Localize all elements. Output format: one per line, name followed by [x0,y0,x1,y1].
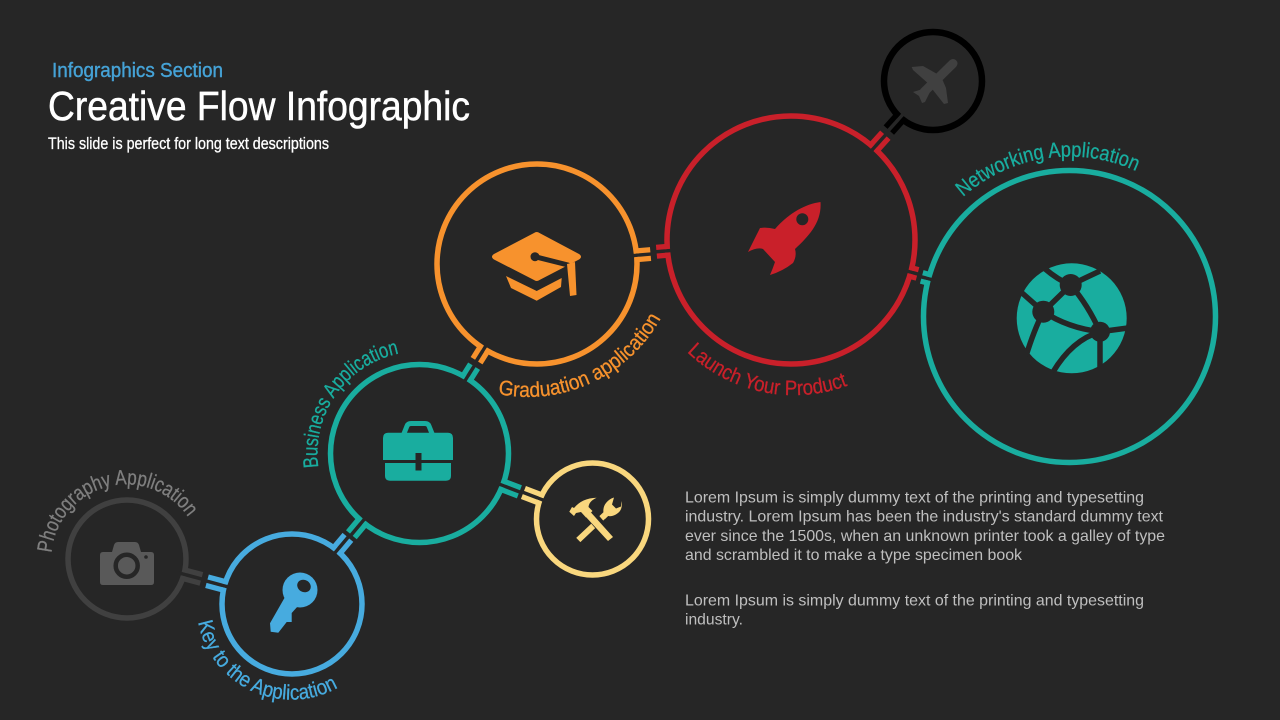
icon: graduation cap [492,232,581,301]
text block: description 2: Lorem Ipsum is simply dummy text of the printing and typesetting [685,592,1144,610]
icon: camera [100,542,154,585]
label: networking application: Networking Application [954,142,1139,196]
header: subtitle: This slide is perfect for long text descriptions [48,135,329,153]
node: key ring [205,533,362,674]
text block: description 1: Lorem Ipsum is simply dummy text of the printing and typesetting [685,490,1144,506]
label: photography application: Photography Application [37,470,196,552]
node: networking ring [920,170,1216,462]
node: business ring [330,362,522,542]
text block: description 1 [685,490,1165,564]
node: tools ring [521,463,648,575]
icon: network globe [1017,263,1128,373]
text block: description 2 [685,592,1144,628]
node: graduation ring [437,164,651,364]
text block: description 2: industry. [685,612,743,628]
node: rocket ring [656,116,919,364]
label: graduation application: Graduation application [500,314,660,398]
icon: rocket [748,202,821,275]
label: launch your product: Launch Your Product [688,342,848,396]
label: key to the application: Key to the Application [198,620,338,702]
text block: description 1: and scrambled it to make a type specimen book [685,547,1023,564]
header: title: Creative Flow Infographic [48,83,470,129]
node: airplane ring [884,32,982,135]
label: business application: Business Application [303,343,398,468]
text block: description 1: industry. Lorem Ipsum has been the industry's standard dummy text [685,508,1164,526]
header: section label: Infographics Section [52,60,223,82]
text block: description 1: ever since the 1500s, when an unknown printer took a galley of type [685,528,1165,545]
icon: briefcase [383,424,453,481]
icon: airplane [912,64,953,104]
icon: key [270,572,318,633]
icon: hammer and wrench [569,498,622,541]
node: photography ring [68,500,203,618]
